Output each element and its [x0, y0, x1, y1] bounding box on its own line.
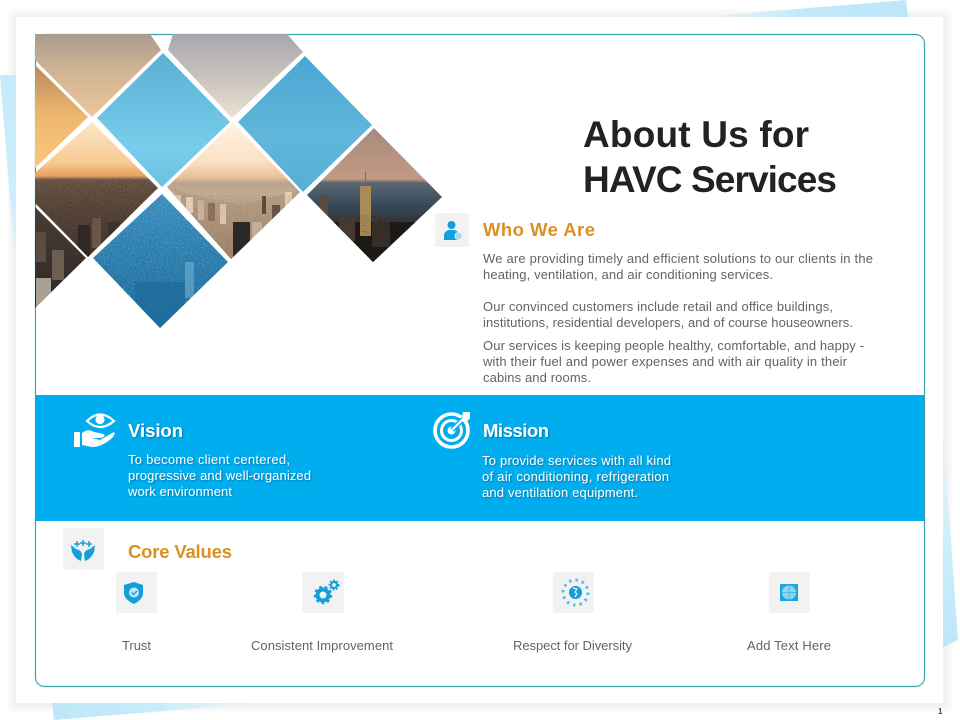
photo tile: bottom left buildings: [35, 207, 86, 308]
heading: mission: Mission: [483, 420, 549, 441]
blue tile: upper left: [97, 53, 230, 187]
icon: gears: [302, 572, 344, 613]
photo tile: top left sky: [35, 34, 161, 117]
photo tile: top centre sky: [168, 34, 303, 118]
photo tile: left sunset: [35, 65, 88, 168]
title: [583, 114, 837, 200]
text block: who we are: with their fuel and power expenses and with air quality in their: [482, 354, 848, 369]
title: About Us for: [583, 114, 809, 155]
text block: who we are: Our services is keeping people healthy, comfortable, and happy -: [483, 338, 864, 353]
label: trust: Trust: [122, 638, 151, 653]
photo mosaic: [30, 34, 445, 332]
text block: who we are: [482, 251, 873, 385]
panel: vision and mission band: [36, 395, 924, 521]
heading: who we are: Who We Are: [483, 219, 595, 240]
core value: trust: [116, 572, 157, 653]
text block: mission: [482, 453, 671, 500]
text block: vision: To become client centered,: [128, 452, 290, 467]
photo tile: centre city: [165, 120, 303, 262]
blue tile: upper right: [238, 56, 372, 192]
text block: mission: and ventilation equipment.: [482, 485, 638, 500]
text block: who we are: We are providing timely and efficient solutions to our clients in the: [483, 251, 873, 266]
icon: vision hand and eye: [74, 414, 115, 447]
heading: core values: Core Values: [128, 541, 232, 562]
heading: vision: Vision: [128, 420, 183, 441]
text block: mission: of air conditioning, refrigeration: [482, 469, 669, 484]
text block: vision: [127, 452, 311, 499]
label: consistent improvement: Consistent Improvement: [251, 638, 393, 653]
photo tile: left city: [35, 122, 158, 257]
title: HAVC Services: [583, 159, 837, 200]
text block: who we are: cabins and rooms.: [483, 370, 591, 385]
text block: who we are: Our convinced customers include retail and office buildings,: [483, 299, 833, 314]
label: respect for diversity: Respect for Diversity: [513, 638, 632, 653]
blue tile: city: [90, 192, 230, 332]
text block: vision: progressive and well-organized: [128, 468, 311, 483]
core value: consistent improvement: [251, 572, 393, 653]
icon: core values hands: [63, 528, 104, 570]
text block: mission: To provide services with all kind: [482, 453, 671, 468]
icon: globe square: [769, 572, 810, 613]
label: add text here: Add Text Here: [747, 638, 831, 653]
icon: globe and people: [553, 572, 594, 613]
text block: who we are: institutions, residential developers, and of course houseowners.: [483, 315, 853, 330]
photo tile: tower and lake: [305, 126, 445, 264]
text block: who we are: heating, ventilation, and air conditioning services.: [483, 267, 773, 282]
core value: respect for diversity: [513, 572, 632, 653]
core value: add text here: [747, 572, 831, 653]
page number: 1: [938, 707, 943, 716]
text block: vision: work environment: [127, 484, 232, 499]
icon: shield: [116, 572, 157, 613]
icon: who we are person: [435, 213, 469, 247]
icon: mission target: [435, 412, 470, 447]
